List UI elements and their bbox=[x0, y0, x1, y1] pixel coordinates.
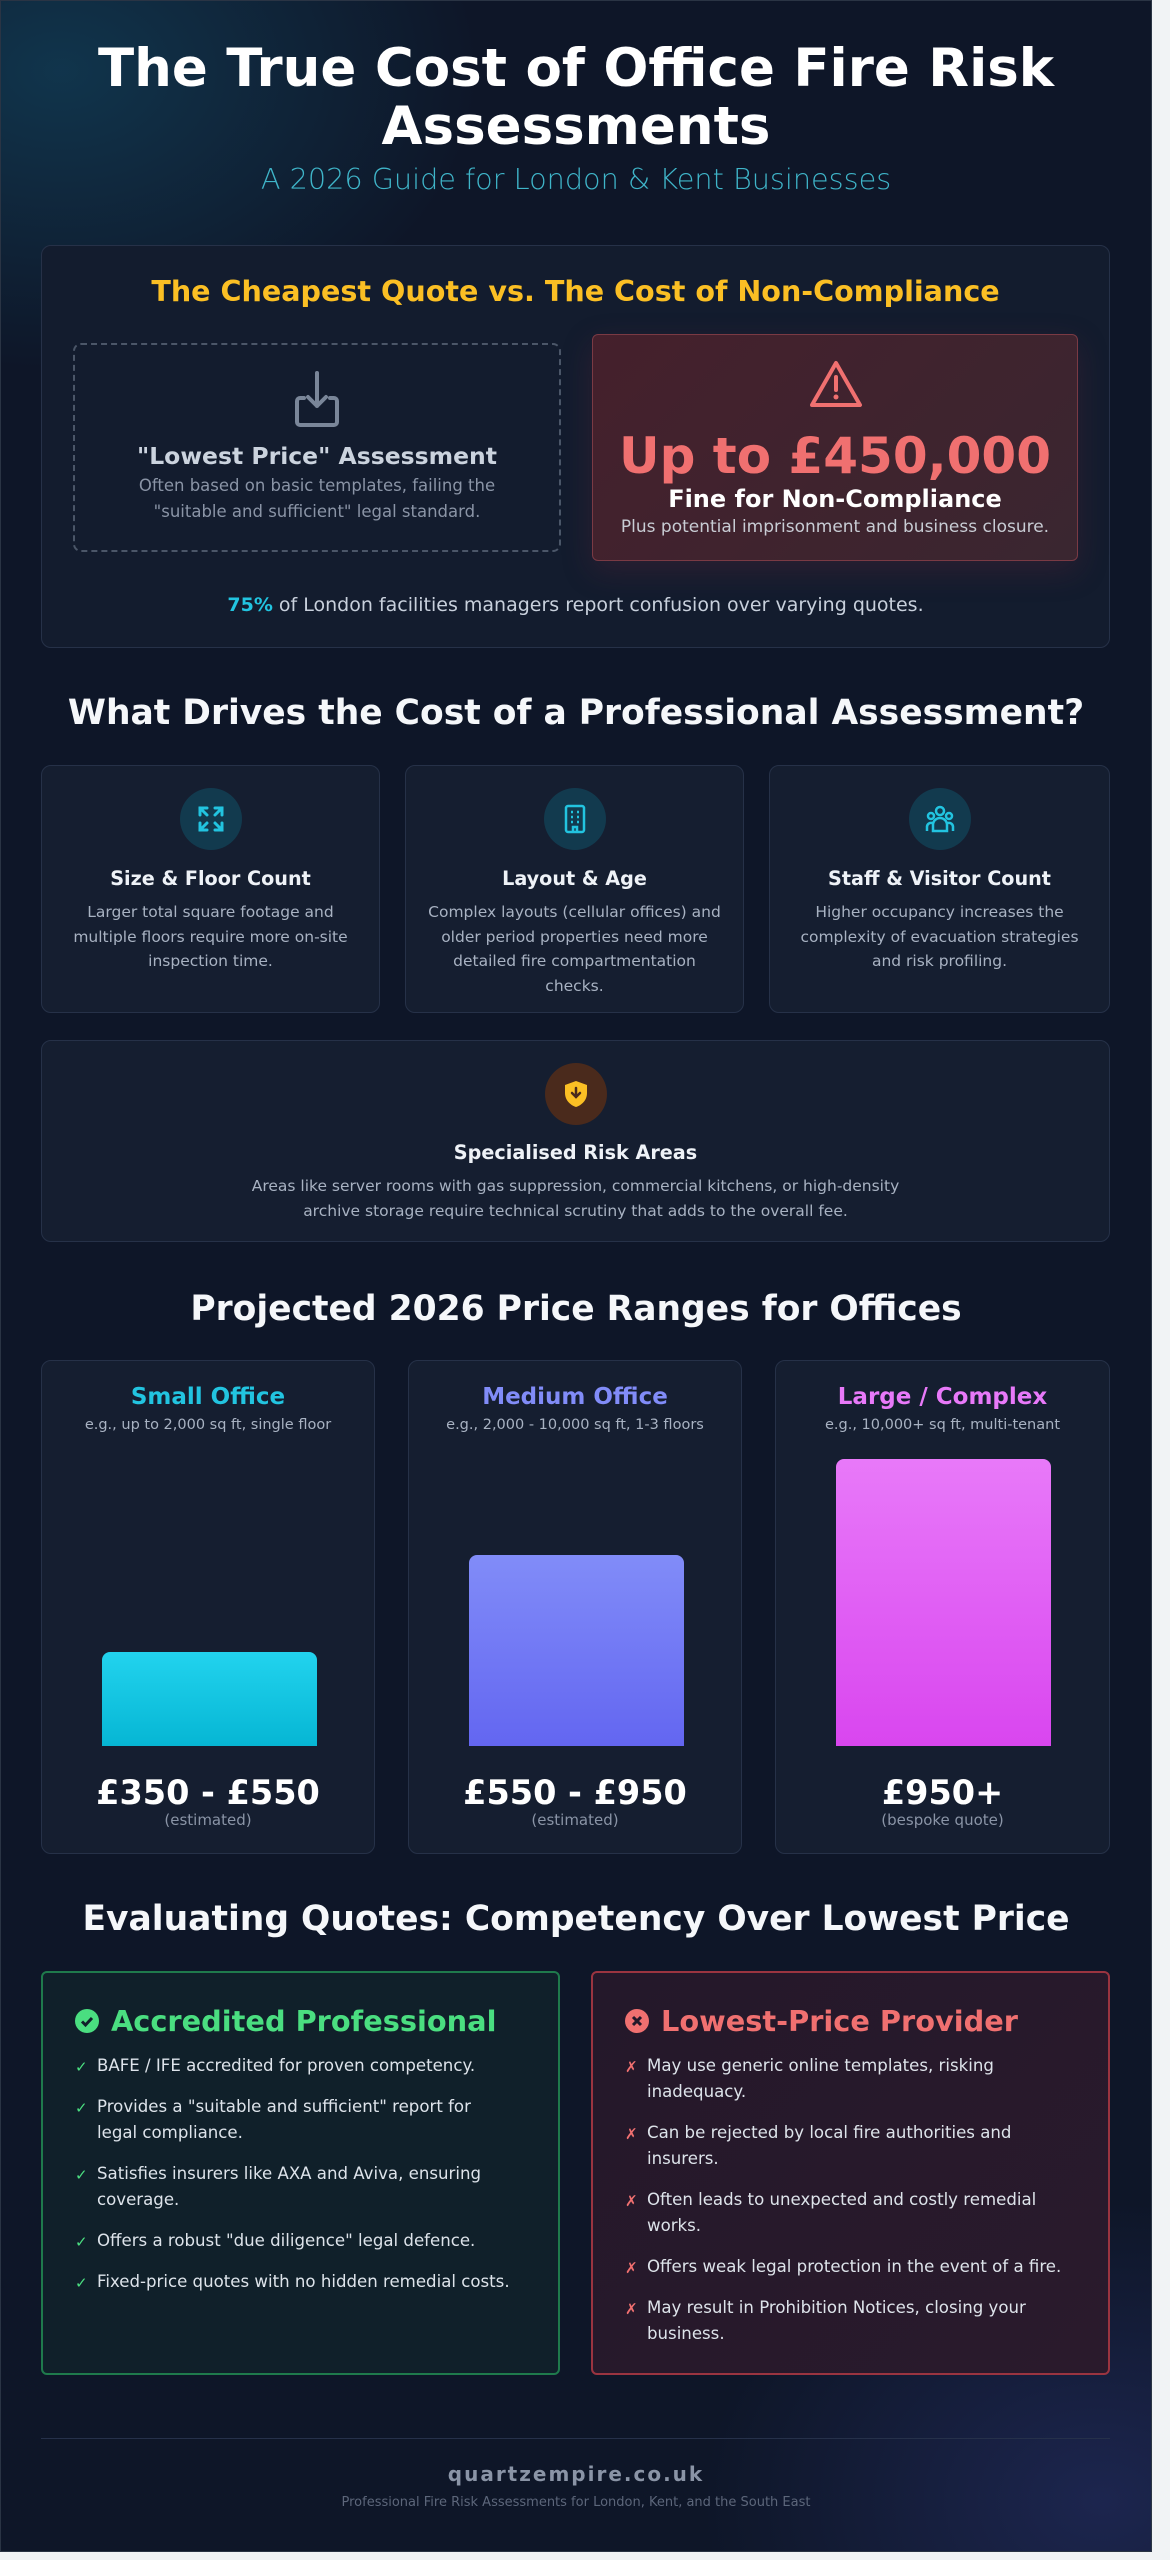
list: Can be rejected by local fire authorities and insurers. bbox=[647, 2123, 1011, 2168]
list: ✗ bbox=[625, 2125, 638, 2143]
list: May result in Prohibition Notices, closing your business. bbox=[647, 2298, 1026, 2343]
title: Large / Complex bbox=[838, 1384, 1047, 1410]
title: Small Office bbox=[131, 1384, 285, 1410]
footer: site: quartzempire.co.uk bbox=[448, 2462, 704, 2486]
bar bbox=[836, 1459, 1051, 1746]
list: BAFE / IFE accredited for proven competency. bbox=[97, 2056, 475, 2075]
note: (estimated) bbox=[531, 1811, 619, 1829]
card: layout & age bbox=[405, 765, 744, 1013]
panel heading: The Cheapest Quote vs. The Cost of Non-Compliance bbox=[151, 274, 1000, 308]
list: ✗ bbox=[625, 2058, 638, 2076]
title: Size & Floor Count bbox=[110, 867, 311, 890]
list: ✓ bbox=[75, 2099, 88, 2117]
heading: Accredited Professional bbox=[111, 2004, 496, 2038]
icon: download tray bbox=[295, 371, 339, 427]
list: ✓ bbox=[75, 2233, 88, 2251]
panel: lowest-price provider bbox=[591, 1971, 1110, 2375]
panel: accredited professional bbox=[41, 1971, 560, 2375]
list bbox=[75, 2056, 510, 2292]
list bbox=[625, 2056, 1061, 2343]
title: Assessments bbox=[382, 96, 770, 157]
icon: warning bbox=[810, 360, 862, 407]
title: Medium Office bbox=[482, 1384, 668, 1410]
panel: cheapest quote vs non-compliance bbox=[41, 245, 1110, 648]
list: Offers weak legal protection in the event of a fire. bbox=[647, 2257, 1061, 2276]
note: (bespoke quote) bbox=[881, 1811, 1004, 1829]
list: legal compliance. bbox=[97, 2123, 243, 2142]
price card: medium office bbox=[408, 1360, 742, 1854]
card: specialised risk areas bbox=[41, 1040, 1110, 1242]
heading: evaluating quotes: Evaluating Quotes: Competency Over Lowest Price bbox=[82, 1899, 1070, 1939]
fine label: Fine for Non-Compliance bbox=[668, 485, 1002, 513]
title: Staff & Visitor Count bbox=[828, 867, 1051, 890]
description: "suitable and sufficient" legal standard. bbox=[154, 502, 480, 521]
heading: cost drivers: What Drives the Cost of a Professional Assessment? bbox=[68, 693, 1084, 733]
list: ✗ bbox=[625, 2259, 638, 2277]
list: Satisfies insurers like AXA and Aviva, ensuring bbox=[97, 2164, 481, 2183]
box: lowest price assessment bbox=[73, 343, 561, 552]
title bbox=[98, 38, 1055, 157]
card: size & floor count bbox=[41, 765, 380, 1013]
description: Complex layouts (cellular offices) and older period properties need more detailed fire compartmentation checks. bbox=[428, 903, 721, 994]
subtitle: e.g., 2,000 - 10,000 sq ft, 1-3 floors bbox=[446, 1417, 704, 1433]
description bbox=[139, 476, 495, 521]
icon: building bbox=[544, 788, 606, 850]
icon: shield bbox=[545, 1063, 607, 1125]
box: fine bbox=[592, 334, 1078, 561]
fine amount: Up to £450,000 bbox=[619, 427, 1051, 485]
subtitle: e.g., 10,000+ sq ft, multi-tenant bbox=[825, 1417, 1060, 1433]
list: Provides a "suitable and sufficient" report for bbox=[97, 2097, 471, 2116]
price: £350 - £550 bbox=[96, 1773, 320, 1812]
price: £950+ bbox=[882, 1773, 1003, 1812]
description: Often based on basic templates, failing the bbox=[139, 476, 495, 495]
description: Larger total square footage and multiple floors require more on-site inspection time. bbox=[73, 903, 348, 970]
bar bbox=[469, 1555, 684, 1746]
fine note: Plus potential imprisonment and business closure. bbox=[621, 517, 1049, 537]
list: coverage. bbox=[97, 2190, 179, 2209]
heading: Lowest-Price Provider bbox=[661, 2004, 1018, 2038]
list: Often leads to unexpected and costly remedial works. bbox=[647, 2190, 1036, 2235]
title: The True Cost of Office Fire Risk bbox=[98, 38, 1054, 99]
price: £550 - £950 bbox=[463, 1773, 687, 1812]
card: staff & visitor count bbox=[769, 765, 1110, 1013]
label: "Lowest Price" Assessment bbox=[137, 442, 497, 470]
list: ✗ bbox=[625, 2192, 638, 2210]
title: Specialised Risk Areas bbox=[454, 1141, 697, 1164]
icon: expand bbox=[180, 788, 242, 850]
footer: tagline: Professional Fire Risk Assessments for London, Kent, and the South East bbox=[342, 2495, 810, 2510]
list: Fixed-price quotes with no hidden remedial costs. bbox=[97, 2272, 510, 2291]
note: (estimated) bbox=[164, 1811, 252, 1829]
stat line: 75% of London facilities managers report confusion over varying quotes. bbox=[227, 594, 924, 616]
subtitle: A 2026 Guide for London & Kent Businesses bbox=[261, 162, 891, 196]
price card: large / complex bbox=[775, 1360, 1110, 1854]
list: Offers a robust "due diligence" legal defence. bbox=[97, 2231, 475, 2250]
list: ✓ bbox=[75, 2166, 88, 2184]
description: Higher occupancy increases the complexity of evacuation strategies and risk profiling. bbox=[800, 903, 1079, 970]
bar bbox=[102, 1652, 317, 1746]
list: ✓ bbox=[75, 2274, 88, 2292]
description: Areas like server rooms with gas suppression, commercial kitchens, or high-density archive storage require technical scrutiny that adds to the overall fee. bbox=[252, 1177, 899, 1220]
price card: small office bbox=[41, 1360, 375, 1854]
list: May use generic online templates, risking inadequacy. bbox=[647, 2056, 994, 2101]
heading: price ranges: Projected 2026 Price Ranges for Offices bbox=[190, 1289, 962, 1329]
list: ✓ bbox=[75, 2058, 88, 2076]
subtitle: e.g., up to 2,000 sq ft, single floor bbox=[85, 1417, 331, 1433]
icon: people bbox=[909, 788, 971, 850]
title: Layout & Age bbox=[502, 867, 647, 890]
list: ✗ bbox=[625, 2300, 638, 2318]
